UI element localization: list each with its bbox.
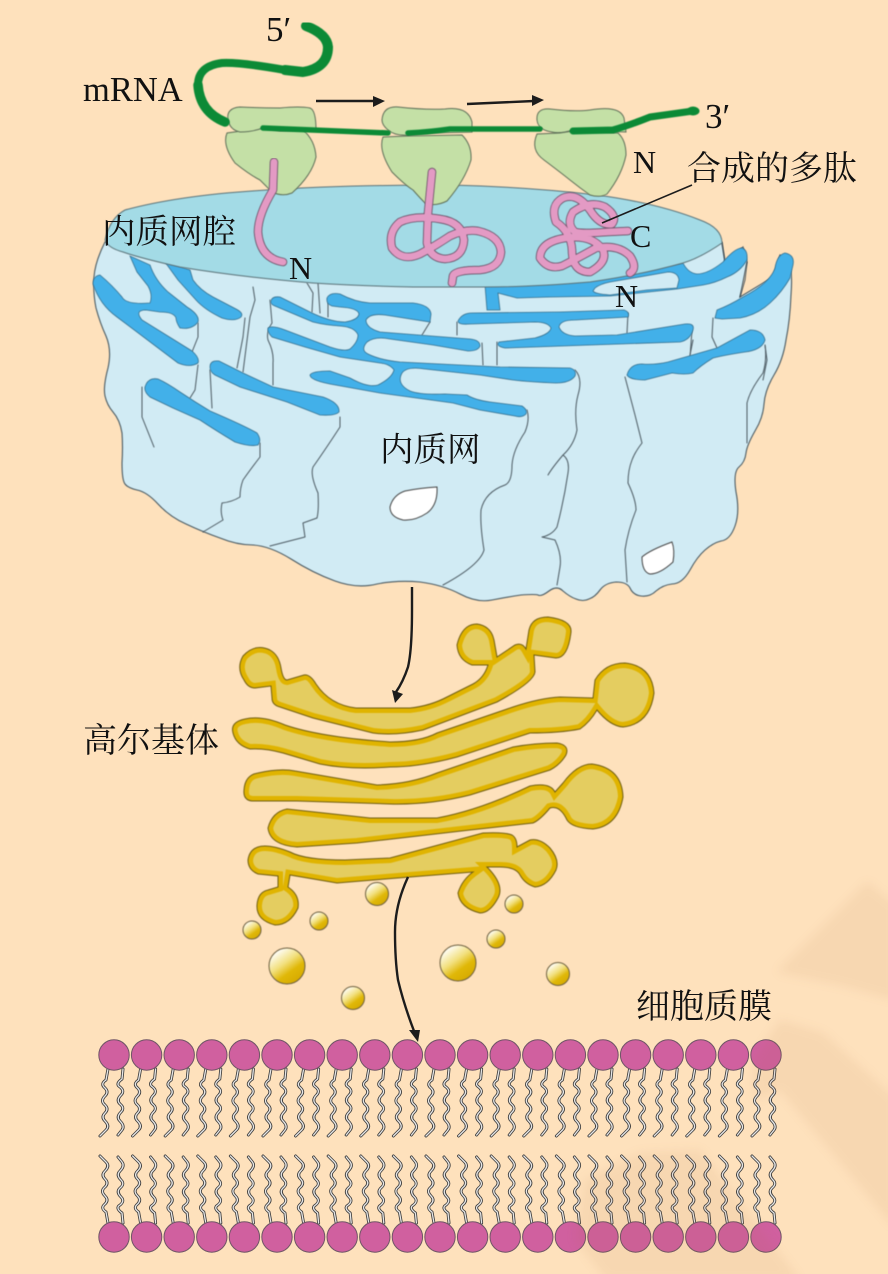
arrow: ER to Golgi (392, 587, 412, 703)
arrow: ribosome direction 2 (467, 95, 544, 106)
arrow: ribosome direction 1 (316, 96, 385, 107)
label: C terminus: C (630, 218, 651, 254)
arrow: Golgi to membrane (395, 877, 420, 1042)
polypeptide 2 (391, 172, 501, 283)
label: N terminus left: N (289, 250, 312, 286)
white vacuoles (390, 487, 674, 574)
label: ER: 内质网 (380, 432, 480, 469)
ribosome 3 (535, 109, 626, 196)
leader line: synthesized polypeptide (602, 185, 692, 223)
ribosome 2 (382, 107, 472, 205)
label: mRNA: mRNA (83, 71, 183, 109)
Golgi cisterna 4 (268, 764, 623, 847)
label: N terminus lower: N (615, 278, 638, 314)
secretory vesicles (243, 882, 570, 1010)
polypeptide 1 (258, 162, 283, 262)
label: synthesized polypeptide: 合成的多肽 (687, 150, 857, 188)
ER body (94, 242, 792, 601)
label: ER lumen: 内质网腔 (102, 214, 236, 251)
ribosomes (226, 107, 626, 205)
label: cell membrane: 细胞质膜 (636, 988, 772, 1026)
endoplasmic reticulum (93, 185, 793, 601)
ribosome 1 (226, 107, 316, 195)
Golgi apparatus (232, 617, 654, 925)
label: Golgi: 高尔基体 (83, 722, 219, 760)
ER fold lines (142, 242, 767, 585)
Golgi cisterna 2 (232, 663, 654, 768)
ER lumen (105, 185, 722, 287)
Golgi cisterna 5 (248, 833, 557, 925)
label: 3 prime: 3′ (705, 97, 730, 136)
outer leaflet (99, 1040, 781, 1136)
Golgi cisterna 3 (244, 743, 567, 804)
label: 5 prime: 5′ (266, 10, 291, 49)
polypeptide 3 (540, 196, 634, 273)
label: N terminus right: N (633, 144, 656, 180)
mRNA strand (198, 26, 700, 133)
polypeptide chains (258, 162, 634, 283)
ER cisternae (blue) (93, 248, 793, 446)
Golgi cisterna 1 (240, 617, 571, 734)
cell membrane phospholipid bilayer (99, 1040, 781, 1252)
inner leaflet (99, 1156, 781, 1252)
